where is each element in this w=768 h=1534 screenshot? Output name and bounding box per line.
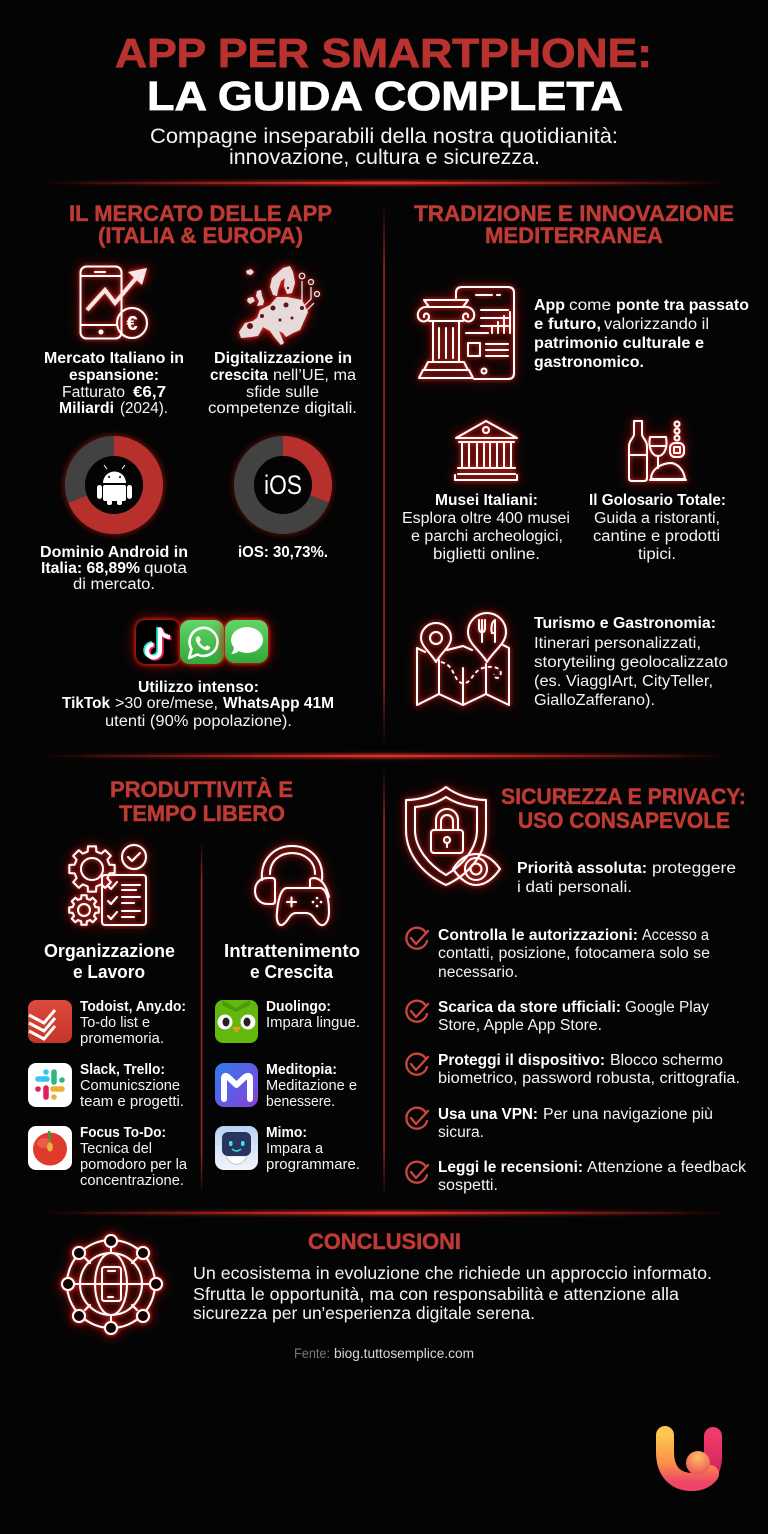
text: conclusioni body: sicurezza per un'esperienza digitale serena.: [193, 1303, 535, 1323]
text: mercato italiano: Fatturato: [62, 384, 125, 401]
text: il golosario totale: cantine e prodotti: [593, 528, 720, 545]
icon: column and tablet: [418, 287, 514, 379]
text: mimo: Impara a: [266, 1141, 324, 1157]
icon: museum: [455, 421, 517, 480]
text: usa una vpn: Per una navigazione più: [543, 1106, 713, 1123]
text: musei italiani: Musei Italiani:: [435, 492, 538, 509]
text: scarica da store ufficiali: Scarica da store ufficiali:: [438, 999, 621, 1016]
text: leggi le recensioni: Leggi le recensioni:: [438, 1159, 583, 1176]
text: ponte tra passato e futuro: App: [534, 297, 565, 314]
text: duolingo: Duolingo:: [266, 999, 331, 1015]
text: il golosario totale: Guida a ristoranti,: [594, 510, 720, 527]
text: proteggi il dispositivo: Proteggi il dispositivo:: [438, 1052, 605, 1069]
icon: wine and food: [629, 421, 686, 481]
text: ponte tra passato e futuro: gastronomico.: [534, 354, 644, 371]
subtitle: innovazione, cultura e sicurezza.: [229, 146, 540, 169]
text: todoist: To-do list e: [80, 1015, 150, 1031]
panel: conclusioni: [62, 1229, 712, 1361]
text: il golosario totale: [589, 492, 726, 563]
text: todoist: promemoria.: [80, 1031, 164, 1047]
icon: todoist: [28, 1000, 72, 1043]
text: ponte tra passato e futuro: [534, 297, 749, 371]
text: meditopia: benessere.: [266, 1094, 335, 1110]
text: usa una vpn: [438, 1106, 713, 1141]
text: priorità assoluta: i dati personali.: [517, 879, 632, 896]
icon: gears and checklist: [69, 845, 146, 925]
subheading: organizzazione e lavoro: Organizzazione: [44, 940, 175, 961]
text: mercato italiano: €6,7: [133, 384, 166, 401]
text: turismo e gastronomia: GialloZafferano).: [534, 692, 655, 709]
text: musei italiani: Esplora oltre 400 musei: [402, 510, 570, 527]
text: mercato italiano: [44, 350, 184, 417]
chart: android donut: [75, 446, 153, 524]
text: turismo e gastronomia: storyteiling geolocalizzato: [534, 654, 728, 671]
text: todoist: Todoist, Any.do:: [80, 999, 186, 1015]
text: mimo: programmare.: [266, 1157, 360, 1173]
panel: sicurezza e privacy: [406, 784, 746, 1194]
text: usa una vpn: sicura.: [438, 1124, 484, 1141]
text: android share: Italia: 68,89%: [41, 560, 140, 577]
icon: phone with growth chart and euro: €: [126, 313, 138, 335]
title: LA GUIDA COMPLETA: [147, 73, 623, 119]
text: android share: Dominio Android in: [40, 544, 188, 561]
icon: check 4: [406, 1108, 428, 1129]
text: digitalizzazione: [208, 350, 357, 417]
heading: mercato: (ITALIA & EUROPA): [98, 223, 303, 248]
heading: tradizione: TRADIZIONE E INNOVAZIONE: [414, 201, 734, 226]
subheading: intrattenimento e crescita: [224, 940, 360, 982]
text: scarica da store ufficiali: Google Play: [625, 999, 709, 1016]
text: focus to-do: concentrazione.: [80, 1173, 184, 1189]
text: duolingo: Impara lingue.: [266, 1015, 360, 1031]
heading: sicurezza: SICUREZZA E PRIVACY:: [501, 784, 746, 809]
icon: phone with growth chart and euro: [80, 266, 147, 338]
heading: conclusioni: CONCLUSIONI: [308, 1229, 461, 1254]
heading: tradizione: MEDITERRANEA: [485, 223, 663, 248]
text: leggi le recensioni: [438, 1159, 746, 1194]
icon: slack: [28, 1063, 72, 1107]
text: il golosario totale: tipici.: [638, 546, 676, 563]
text: mercato italiano: (2024).: [120, 400, 168, 417]
icon: meditopia: [215, 1063, 258, 1107]
text: mimo: [266, 1125, 360, 1173]
text: utilizzo intenso: [62, 679, 334, 730]
text: conclusioni body: [193, 1263, 712, 1323]
text: ponte tra passato e futuro: valorizzando il: [604, 316, 709, 333]
text: proteggi il dispositivo: biometrico, password robusta, crittografia.: [438, 1070, 740, 1087]
text: utilizzo intenso: utenti (90% popolazione).: [105, 713, 292, 730]
heading: produttività: TEMPO LIBERO: [119, 801, 285, 826]
subtitle: [150, 125, 618, 169]
icon: check 1: [406, 928, 428, 949]
text: ponte tra passato e futuro: come: [569, 297, 611, 314]
text: slack: [80, 1062, 184, 1110]
text: turismo e gastronomia: [534, 615, 728, 709]
text: controlla le autorizzazioni: contatti, posizione, fotocamera solo se: [438, 945, 710, 962]
text: ponte tra passato e futuro: patrimonio culturale e: [534, 335, 704, 352]
icon: network globe with phone: [62, 1235, 162, 1334]
icon: whatsapp: [180, 620, 224, 664]
text: meditopia: Meditopia:: [266, 1062, 337, 1078]
text: android share: quota: [144, 560, 187, 577]
text: scarica da store ufficiali: [438, 999, 709, 1034]
icon: duolingo: [215, 1000, 258, 1043]
text: conclusioni body: Sfrutta le opportunità, ma con responsabilità e attenzione alla: [193, 1284, 679, 1304]
heading: tradizione: [414, 201, 734, 248]
text: utilizzo intenso: TikTok: [62, 695, 110, 712]
text: controlla le autorizzazioni: Accesso a: [642, 927, 709, 944]
text: focus to-do: Tecnica del: [80, 1141, 152, 1157]
icon: messages: [225, 620, 268, 663]
subheading: organizzazione e lavoro: [44, 940, 175, 982]
text: ponte tra passato e futuro: ponte tra passato: [616, 297, 749, 314]
icon: europe digital map: [239, 266, 320, 345]
text: controlla le autorizzazioni: necessario.: [438, 964, 518, 981]
text: digitalizzazione: competenze digitali.: [208, 400, 357, 417]
text: meditopia: Meditazione e: [266, 1078, 357, 1094]
text: ios share: iOS: 30,73%.: [238, 544, 328, 561]
text: proteggi il dispositivo: [438, 1052, 740, 1087]
source: biog.tuttosemplice.com: [334, 1346, 474, 1361]
text: android share: di mercato.: [73, 576, 155, 593]
text: digitalizzazione: nell’UE, ma: [273, 367, 356, 384]
heading: sicurezza: USO CONSAPEVOLE: [518, 808, 730, 833]
text: priorità assoluta: [517, 860, 736, 896]
text: musei italiani: [402, 492, 570, 563]
chart: ios donut: [244, 446, 322, 524]
panel: il mercato delle app: [40, 201, 357, 730]
text: controlla le autorizzazioni: [438, 927, 710, 981]
heading: produttività: PRODUTTIVITÀ E: [110, 777, 293, 802]
text: turismo e gastronomia: (es. ViaggIArt, CityTeller,: [534, 673, 713, 690]
icon: focus to-do: [28, 1126, 72, 1170]
text: conclusioni body: Un ecosistema in evoluzione che richiede un approccio informato.: [193, 1263, 712, 1283]
text: utilizzo intenso: Utilizzo intenso:: [138, 679, 259, 696]
title: APP PER SMARTPHONE:: [115, 30, 652, 76]
text: usa una vpn: Usa una VPN:: [438, 1106, 538, 1123]
source: Fente:: [294, 1346, 330, 1361]
text: scarica da store ufficiali: Store, Apple App Store.: [438, 1017, 602, 1034]
icon: shield with lock and eye: [406, 787, 500, 885]
text: turismo e gastronomia: Turismo e Gastronomia:: [534, 615, 716, 632]
text: meditopia: [266, 1062, 357, 1110]
chart: ios donut: iOS: [264, 470, 302, 500]
text: digitalizzazione: sfide sulle: [246, 384, 319, 401]
text: controlla le autorizzazioni: Controlla le autorizzazioni:: [438, 927, 638, 944]
text: slack: team e progetti.: [80, 1094, 184, 1110]
text: proteggi il dispositivo: Blocco schermo: [610, 1052, 723, 1069]
logo: [665, 1435, 713, 1482]
text: musei italiani: e parchi archeologici,: [411, 528, 563, 545]
icon: check 2: [406, 1001, 428, 1022]
text: ponte tra passato e futuro: e futuro,: [534, 316, 601, 333]
subheading: organizzazione e lavoro: e Lavoro: [73, 961, 145, 982]
icon: tiktok: [136, 620, 180, 664]
icon: headset and gamepad: [255, 846, 329, 925]
text: il golosario totale: Il Golosario Totale:: [589, 492, 726, 509]
text: utilizzo intenso: >30 ore/mese,: [115, 695, 218, 712]
text: mercato italiano: Mercato Italiano in: [44, 350, 184, 367]
text: utilizzo intenso: WhatsApp 41M: [223, 695, 334, 712]
text: mercato italiano: espansione:: [69, 367, 159, 384]
heading: produttività: [110, 777, 293, 826]
text: android share: [40, 544, 188, 593]
icon: map with pins: [417, 613, 509, 705]
text: leggi le recensioni: Attenzione a feedback: [587, 1159, 746, 1176]
text: digitalizzazione: crescita: [210, 367, 268, 384]
text: slack: Comunicszione: [80, 1078, 180, 1094]
text: slack: Slack, Trello:: [80, 1062, 165, 1078]
text: duolingo: [266, 999, 360, 1031]
text: leggi le recensioni: sospetti.: [438, 1177, 498, 1194]
text: mimo: Mimo:: [266, 1125, 307, 1141]
subtitle: Compagne inseparabili della nostra quotidianità:: [150, 125, 618, 148]
icon: mimo: [215, 1126, 258, 1170]
text: priorità assoluta: proteggere: [652, 860, 736, 877]
panel: tradizione e innovazione: [402, 201, 749, 709]
icon: check 3: [406, 1054, 428, 1075]
text: priorità assoluta: Priorità assoluta:: [517, 860, 647, 877]
text: focus to-do: pomodoro per la: [80, 1157, 188, 1173]
icon: android: [97, 465, 132, 505]
subheading: intrattenimento e crescita: Intrattenimento: [224, 940, 360, 961]
text: focus to-do: [80, 1125, 188, 1189]
text: focus to-do: Focus To-Do:: [80, 1125, 166, 1141]
subheading: intrattenimento e crescita: e Crescita: [250, 961, 334, 982]
text: todoist: [80, 999, 186, 1047]
panel: produttività e tempo libero: [28, 777, 360, 1189]
heading: mercato: [69, 201, 332, 248]
heading: mercato: IL MERCATO DELLE APP: [69, 201, 332, 226]
text: digitalizzazione: Digitalizzazione in: [214, 350, 352, 367]
text: turismo e gastronomia: Itinerari personalizzati,: [534, 635, 701, 652]
text: musei italiani: biglietti online.: [433, 546, 540, 563]
heading: sicurezza: [501, 784, 746, 833]
icon: check 5: [406, 1162, 428, 1183]
text: mercato italiano: Miliardi: [59, 400, 114, 417]
title: [115, 30, 652, 119]
